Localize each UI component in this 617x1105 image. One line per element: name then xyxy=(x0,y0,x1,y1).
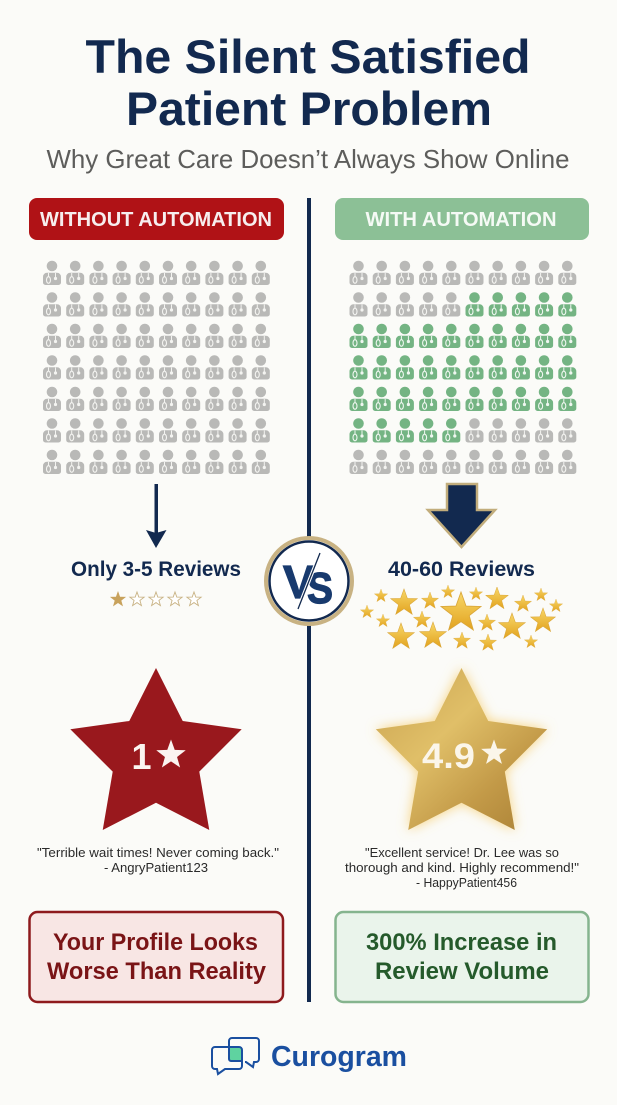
header: without automation xyxy=(29,198,284,240)
logo: curogram: Curogram xyxy=(271,1041,407,1073)
quote: positive xyxy=(345,846,579,890)
callout: negative outcome: Your Profile Looks xyxy=(53,929,258,956)
callout: positive outcome xyxy=(336,912,588,1002)
vs badge: V xyxy=(283,556,315,608)
callout: negative outcome: Worse Than Reality xyxy=(47,958,267,985)
big red star rating xyxy=(70,668,242,830)
quote: negative xyxy=(37,846,279,875)
label: only 3-5 reviews: Only 3-5 Reviews xyxy=(71,558,241,581)
star cluster xyxy=(360,585,563,650)
title: The Silent Satisfied xyxy=(86,30,530,83)
center divider xyxy=(307,198,311,1002)
header: with automation xyxy=(335,198,589,240)
big gold star rating: 4.9 xyxy=(422,737,475,776)
icon: chat bubbles xyxy=(212,1038,259,1074)
quote: negative: - AngryPatient123 xyxy=(104,861,208,875)
quote: positive: - HappyPatient456 xyxy=(416,876,517,890)
callout: positive outcome: Review Volume xyxy=(375,958,549,985)
big red star rating: 1 xyxy=(131,736,152,777)
title xyxy=(86,30,530,135)
quote: negative: "Terrible wait times! Never coming back." xyxy=(37,846,279,860)
title: Patient Problem xyxy=(126,82,492,135)
header: without automation: WITHOUT AUTOMATION xyxy=(40,209,272,231)
patient grid: without automation xyxy=(43,261,270,474)
quote: positive: "Excellent service! Dr. Lee was so xyxy=(365,846,559,860)
subtitle: Why Great Care Doesn’t Always Show Online xyxy=(46,144,570,174)
vs badge: S xyxy=(307,564,333,613)
vs badge xyxy=(266,538,352,624)
callout: negative outcome xyxy=(30,912,283,1002)
arrow: thin down xyxy=(146,484,166,548)
patient grid: with automation xyxy=(349,261,576,474)
rating: one of five stars xyxy=(110,591,201,606)
callout: positive outcome: 300% Increase in xyxy=(366,929,557,956)
big gold star rating xyxy=(376,668,547,830)
header: with automation: WITH AUTOMATION xyxy=(366,209,556,231)
arrow: bold down xyxy=(428,484,495,547)
quote: positive: thorough and kind. Highly recommend!" xyxy=(345,861,579,875)
logo: curogram xyxy=(212,1038,407,1074)
label: 40-60 reviews: 40-60 Reviews xyxy=(388,558,535,581)
